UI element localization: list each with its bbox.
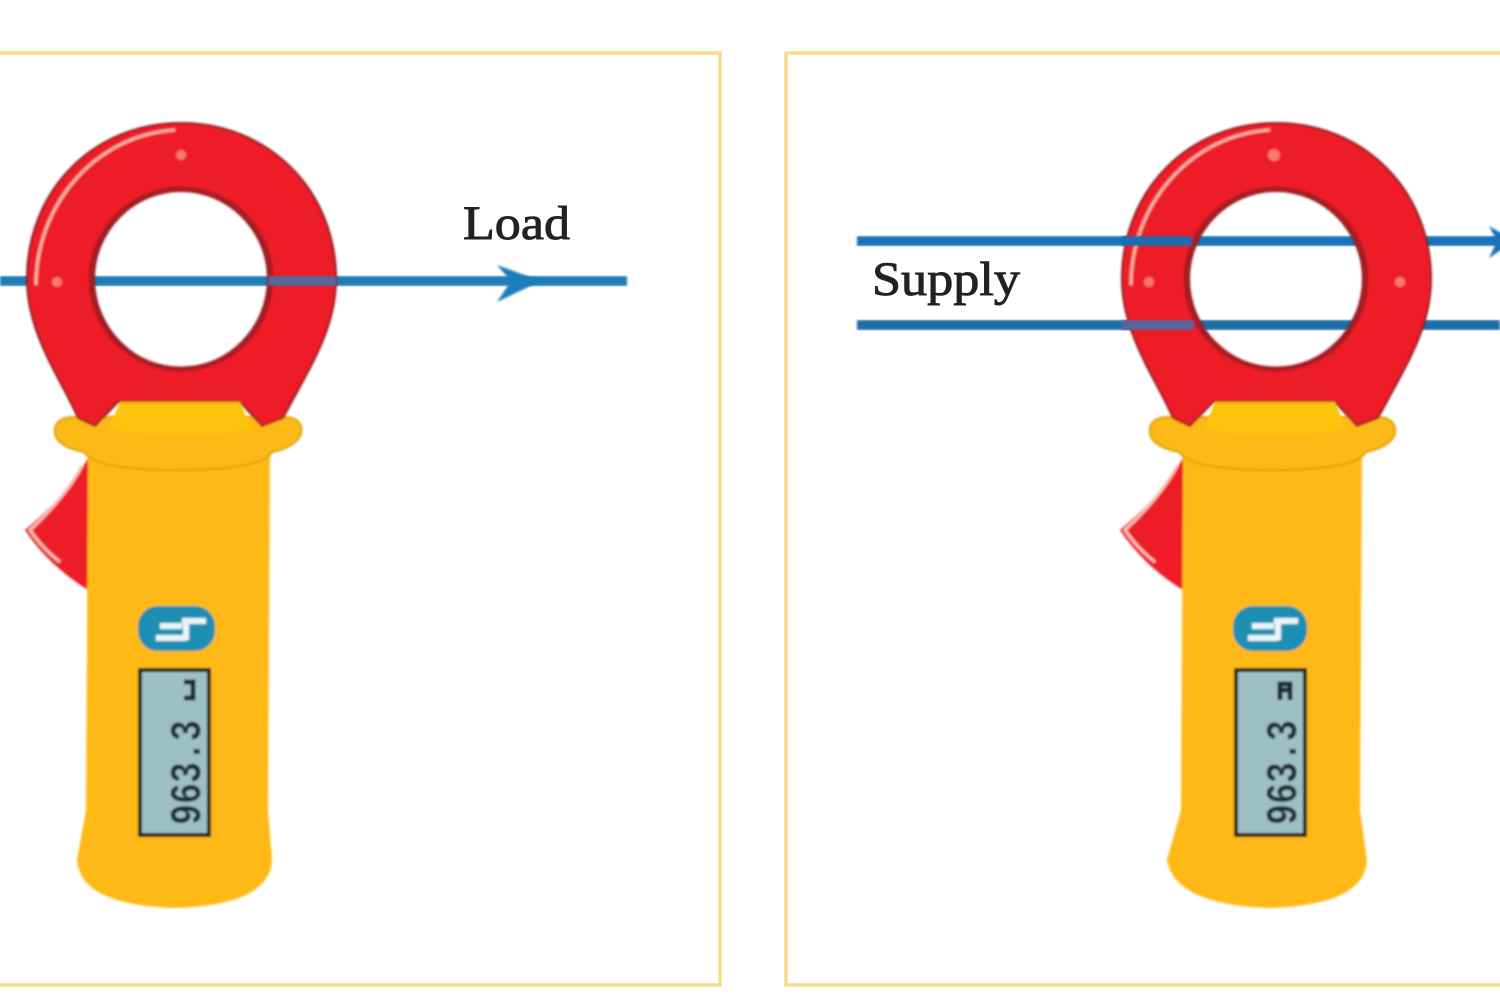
body [1167,455,1367,908]
jaw dots [1144,149,1405,287]
lcd unit [1280,684,1290,700]
panel: right supply measurement [786,53,1500,985]
logo badge [138,606,215,651]
wire: load conductor behind clamp [0,276,627,286]
label: supply: Supply [872,253,1020,306]
wire: upper supply overlay on jaw [1122,236,1192,246]
yellow cap [1203,402,1347,435]
trigger [25,458,88,590]
label: load: Load [463,197,570,250]
jaw ring [27,123,336,426]
clamp meter: right [1120,123,1431,908]
lcd display [1236,670,1305,835]
arrow: supply direction [1489,226,1500,258]
lcd unit [184,682,193,698]
trigger highlight [30,466,82,562]
clamp meter: left [25,123,336,908]
wire: lower supply overlay on jaw [1122,320,1194,330]
wire: lower supply conductor [857,320,1500,330]
collar [55,417,301,470]
wire: upper supply conductor [857,236,1500,246]
panel: left load measurement [0,53,720,985]
jaw inner shadow [1186,189,1366,369]
trigger [1120,458,1183,590]
arrow: load direction [497,265,541,302]
lcd display [140,670,209,835]
logo mark [1248,621,1298,640]
jaw highlight [36,130,175,285]
lcd reading: 963.3 [1260,720,1310,825]
yellow cap [108,402,252,435]
jaw dots [52,150,186,287]
jaw ring [1122,123,1431,426]
logo badge [1233,606,1307,651]
jaw highlight [1131,130,1270,285]
logo mark [156,621,206,640]
body [77,455,272,908]
trigger highlight [1125,466,1177,562]
lcd reading: 963.3 [164,720,214,825]
jaw inner shadow [91,189,271,369]
wire: load conductor overlay on jaw [268,276,336,286]
collar [1150,417,1395,470]
